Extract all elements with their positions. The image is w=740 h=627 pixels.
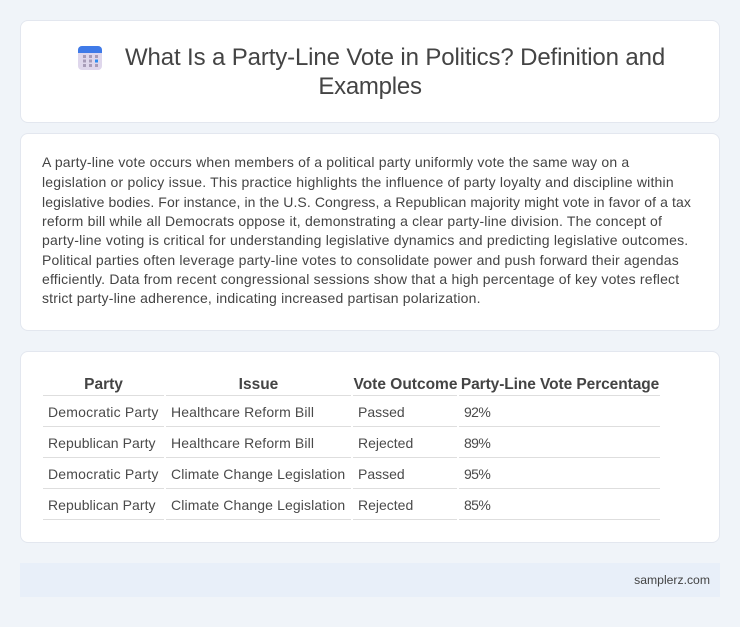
table: party-line votes: Climate Change Legislation <box>171 466 345 482</box>
table: party-line votes: Healthcare Reform Bill <box>171 404 314 420</box>
heading: title line 2: Examples <box>318 73 422 100</box>
text block: description: legislation or policy issue. This practice highlights the influence of party loyalty and discipline within <box>42 174 674 190</box>
table: party-line votes: Republican Party <box>48 435 156 451</box>
table: party-line votes: Democratic Party <box>48 404 159 420</box>
table: party-line votes <box>43 376 660 520</box>
text block: description: strict party-line adherence, indicating increased partisan polarization. <box>42 290 481 306</box>
table: party-line votes: Rejected <box>358 435 413 451</box>
footer text: samplerz.com <box>634 573 710 587</box>
table: party-line votes: 85% <box>464 497 490 513</box>
table: party-line votes: Party <box>84 376 123 393</box>
table: party-line votes: Party-Line Vote Percentage <box>461 376 659 393</box>
panel: title card <box>20 20 720 123</box>
panel: table card <box>20 351 720 543</box>
text block: description: efficiently. Data from recent congressional sessions show that a high percentage of key votes reflect <box>42 271 679 287</box>
text block: description: A party-line vote occurs when members of a political party uniformly vote the same way on a <box>42 154 629 170</box>
table: party-line votes: Climate Change Legislation <box>171 497 345 513</box>
text block: description: Political parties often leverage party-line votes to consolidate power and push forward their agendas <box>42 252 679 268</box>
footer bar <box>20 563 720 597</box>
table: party-line votes: Democratic Party <box>48 466 159 482</box>
table: party-line votes: Rejected <box>358 497 413 513</box>
table: party-line votes: 92% <box>464 404 490 420</box>
text block: description: party-line voting is critical for understanding legislative dynamics and predicting legislative outcomes. <box>42 232 688 248</box>
table: party-line votes: Vote Outcome <box>354 376 457 393</box>
table: party-line votes: Passed <box>358 466 405 482</box>
panel: description card <box>20 133 720 331</box>
icon: calendar <box>78 46 102 70</box>
text block: description: reform bill while all Democrats oppose it, demonstrating a clear party-line division. The concept of <box>42 213 662 229</box>
table: party-line votes: Healthcare Reform Bill <box>171 435 314 451</box>
table: party-line votes: Passed <box>358 404 405 420</box>
table: party-line votes: 89% <box>464 435 490 451</box>
text block: description: legislative bodies. For instance, in the U.S. Congress, a Republican majority might vote in favor of a tax <box>42 194 691 210</box>
table: party-line votes: Republican Party <box>48 497 156 513</box>
heading: title line 1: What Is a Party-Line Vote in Politics? Definition and <box>125 44 665 71</box>
table: party-line votes: 95% <box>464 466 490 482</box>
table: party-line votes: Issue <box>239 376 278 393</box>
